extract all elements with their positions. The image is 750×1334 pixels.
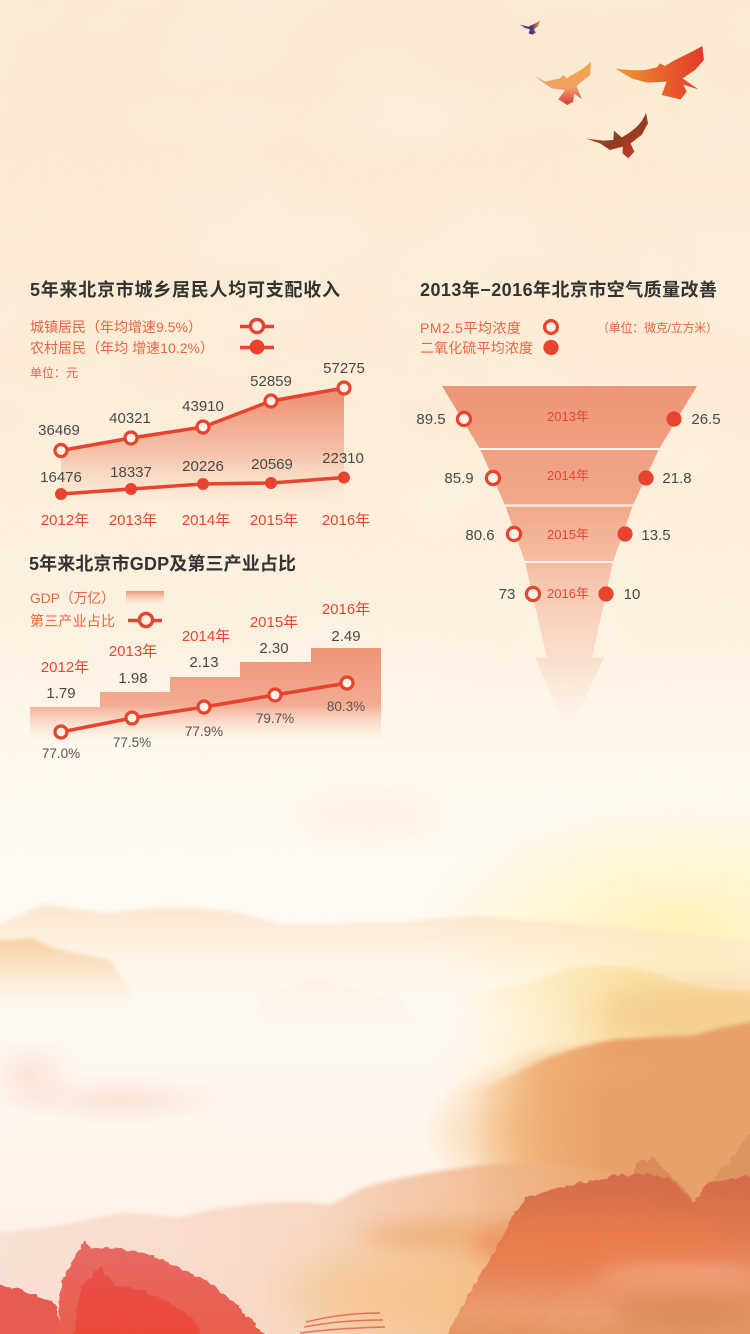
legend: GDP (30, 590, 164, 606)
rural income values: 22310 (322, 450, 364, 467)
PM2.5 values: 85.9 (444, 470, 474, 487)
sulfur dioxide values: 21.8 (662, 470, 692, 487)
sulfur dioxide values: 13.5 (641, 527, 671, 544)
PM2.5 values: 89.5 (416, 411, 446, 428)
GDP year labels (41, 601, 370, 676)
tertiary share values: 77.5% (113, 735, 151, 750)
rural income values: 20226 (182, 458, 224, 475)
GDP values (46, 628, 361, 702)
funnel year labels: 2014年 (547, 468, 589, 483)
year axis labels: 2013年 (109, 512, 157, 529)
PM2.5 values (416, 411, 515, 603)
area chart fill (61, 388, 344, 505)
GDP values: 2.49 (331, 628, 361, 645)
GDP values: 1.79 (46, 685, 76, 702)
urban income values: 57275 (323, 360, 365, 377)
legend: tertiary share (30, 613, 162, 629)
urban income values: 40321 (109, 410, 151, 427)
legend: tertiary share: 第三产业占比 (30, 613, 115, 629)
funnel dividers (480, 448, 659, 563)
sulfur dioxide values: 10 (624, 586, 640, 603)
year axis labels: 2014年 (182, 512, 230, 529)
icon: dark red bird (586, 113, 648, 158)
sulfur dioxide values: 26.5 (691, 411, 721, 428)
urban income values: 52859 (250, 373, 292, 390)
tertiary share values: 77.9% (185, 724, 223, 739)
rural income values: 20569 (251, 456, 293, 473)
PM2.5 values: 80.6 (465, 527, 495, 544)
urban income values: 43910 (182, 398, 224, 415)
funnel year labels: 2013年 (547, 409, 589, 424)
panel: GDP and tertiary share (29, 553, 381, 761)
PM2.5 markers (457, 412, 540, 601)
line: rural income (55, 472, 350, 500)
GDP year labels: 2015年 (250, 614, 298, 631)
heading: GDP: 5年来北京市GDP及第三产业占比 (29, 553, 296, 574)
line: tertiary share (55, 677, 353, 738)
heading: income: 5年来北京市城乡居民人均可支配收入 (30, 279, 340, 300)
tertiary share values (42, 699, 365, 761)
icon: flock of birds (520, 20, 704, 158)
sulfur dioxide markers (598, 411, 682, 602)
urban income values: 36469 (38, 422, 80, 439)
tertiary share values: 80.3% (327, 699, 365, 714)
rural income values: 16476 (40, 469, 82, 486)
GDP year labels: 2013年 (109, 643, 157, 660)
GDP values: 1.98 (118, 670, 148, 687)
PM2.5 values: 73 (499, 586, 515, 603)
funnel year labels: 2015年 (547, 527, 589, 542)
year axis labels (41, 512, 370, 529)
stepped GDP bars (30, 648, 381, 742)
icon: medium orange bird (535, 62, 591, 105)
panel: air quality (416, 279, 721, 737)
funnel year labels: 2016年 (547, 586, 589, 601)
icon: small blue bird (520, 20, 540, 35)
GDP values: 2.30 (259, 640, 289, 657)
legend: rural residents: 农村居民（年均 增速10.2%） (30, 340, 214, 356)
icon: large orange bird (615, 46, 704, 99)
legend: sulfur dioxide: 二氧化硫平均浓度 (420, 340, 533, 356)
tertiary share values: 77.0% (42, 746, 80, 761)
year axis labels: 2015年 (250, 512, 298, 529)
line: urban income (55, 382, 350, 456)
GDP year labels: 2014年 (182, 628, 230, 645)
rural income values (40, 450, 364, 486)
GDP year labels: 2016年 (322, 601, 370, 618)
unit note: （单位：微克/立方米） (597, 320, 718, 335)
funnel year labels (547, 409, 589, 601)
panel: urban and rural income (30, 279, 370, 529)
GDP year labels: 2012年 (41, 659, 89, 676)
year axis labels: 2016年 (322, 512, 370, 529)
funnel arrow (442, 386, 697, 737)
legend: PM2.5: PM2.5平均浓度 (420, 320, 521, 336)
year axis labels: 2012年 (41, 512, 89, 529)
unit note: 单位：元 (30, 365, 78, 380)
GDP values: 2.13 (189, 654, 219, 671)
tertiary share values: 79.7% (256, 711, 294, 726)
legend: urban residents: 城镇居民（年均增速9.5%） (30, 319, 202, 335)
heading: air quality: 2013年−2016年北京市空气质量改善 (420, 279, 717, 300)
urban income values (38, 360, 365, 439)
legend: GDP: GDP（万亿） (30, 590, 115, 606)
sulfur dioxide values (624, 411, 721, 603)
rural income values: 18337 (110, 464, 152, 481)
